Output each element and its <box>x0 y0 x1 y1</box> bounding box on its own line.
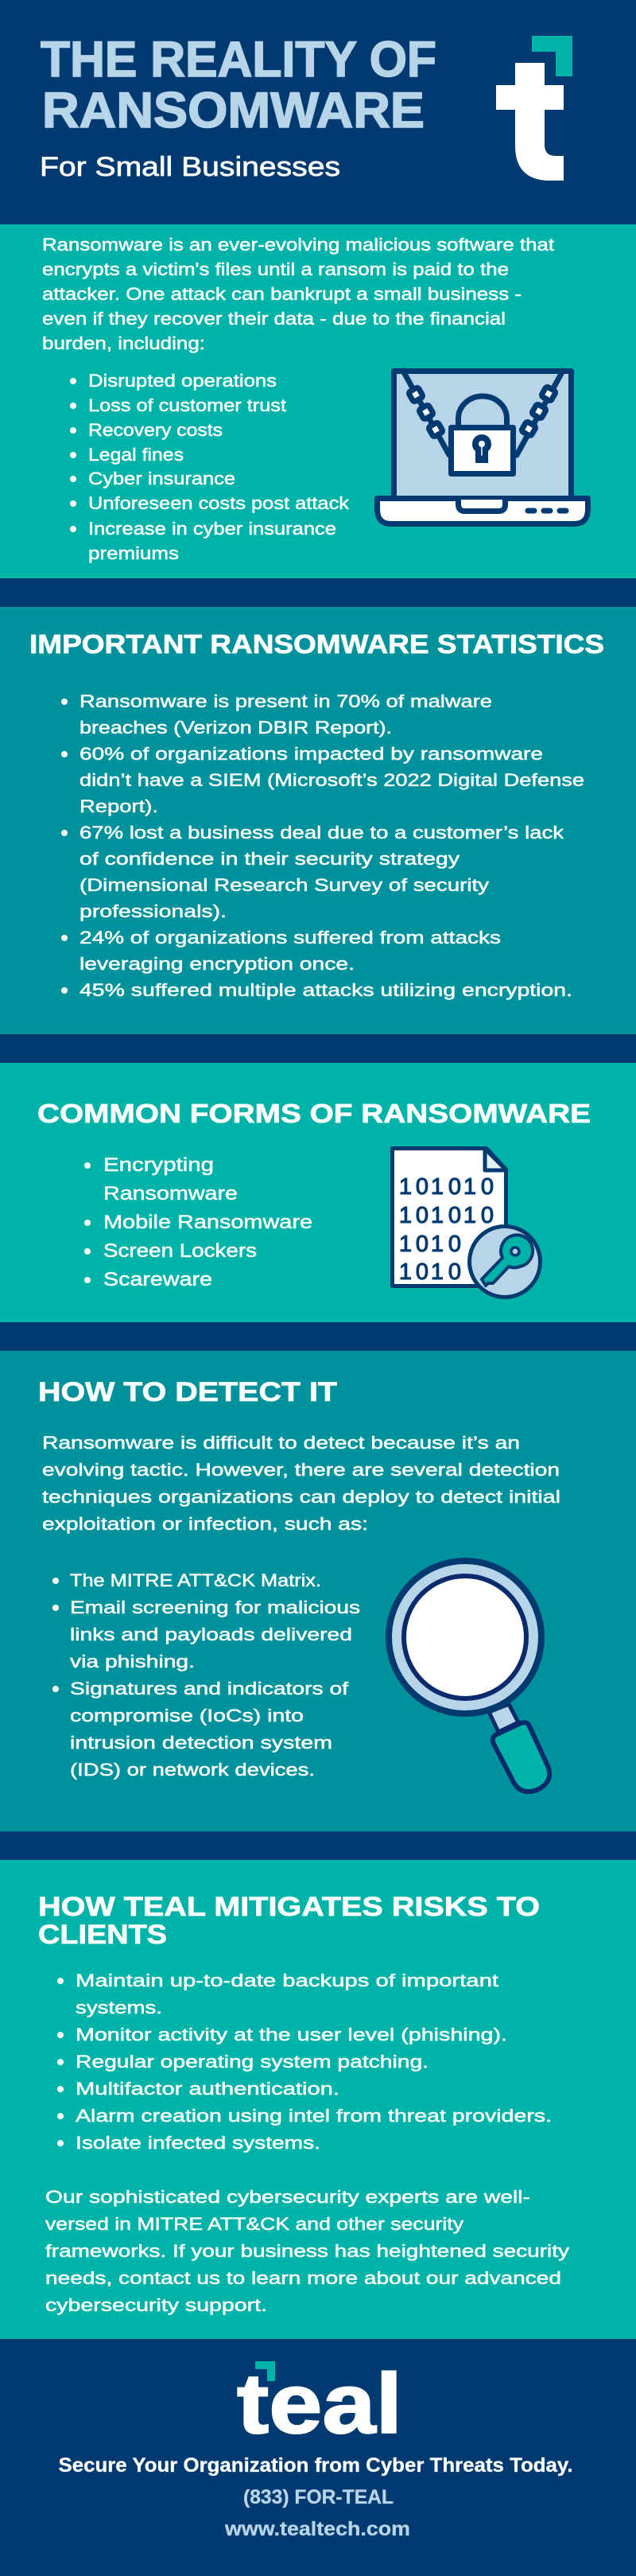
closing paragraph <box>45 2187 569 2315</box>
list: financial burdens: Recovery costs <box>88 420 223 440</box>
title: THE REALITY OF <box>41 32 436 88</box>
phone number: (833) FOR-TEAL <box>243 2486 394 2508</box>
list: financial burdens: Loss of customer trust <box>88 395 286 415</box>
list: financial burdens: premiums <box>88 543 179 563</box>
panel: how to detect <box>0 1351 636 1831</box>
heading: detect: HOW TO DETECT IT <box>38 1377 337 1407</box>
list: financial burdens: Unforeseen costs post attack <box>88 493 350 513</box>
panel: introduction <box>0 224 636 578</box>
closing paragraph: needs, contact us to learn more about our advanced <box>45 2268 561 2288</box>
website: www.tealtech.com <box>224 2518 410 2540</box>
panel: common forms <box>0 1063 636 1322</box>
detect paragraph: exploitation or infection, such as: <box>42 1514 368 1534</box>
list: statistics: professionals). <box>80 901 227 921</box>
icon: binary file with key <box>393 1149 541 1297</box>
panel: how teal mitigates <box>0 1860 636 2339</box>
icon: binary file with key: 101010 <box>399 1203 494 1228</box>
closing paragraph: frameworks. If your business has heightened security <box>45 2241 569 2261</box>
list: financial burdens <box>70 371 350 563</box>
title: RANSOMWARE <box>42 83 425 138</box>
list: mitigations: Maintain up-to-date backups of important <box>76 1971 498 1990</box>
list: statistics: didn’t have a SIEM (Microsoft’s 2022 Digital Defense <box>80 770 584 790</box>
list: statistics: leveraging encryption once. <box>80 954 355 974</box>
closing paragraph: versed in MITRE ATT&CK and other security <box>45 2214 463 2234</box>
closing paragraph: Our sophisticated cybersecurity experts are well- <box>45 2187 530 2207</box>
list: financial burdens: Legal fines <box>88 445 184 465</box>
list: mitigations: Monitor activity at the user level (phishing). <box>76 2025 507 2045</box>
list: statistics: Report). <box>80 796 158 816</box>
list: statistics: 45% suffered multiple attacks utilizing encryption. <box>80 980 572 1000</box>
list: detection techniques: via phishing. <box>70 1652 195 1671</box>
list: detection techniques: links and payloads delivered <box>70 1625 352 1644</box>
intro paragraph <box>42 235 554 353</box>
list: detection techniques: The MITRE ATT&CK Matrix. <box>70 1570 321 1590</box>
heading: common forms: COMMON FORMS OF RANSOMWARE <box>37 1099 591 1128</box>
call to action: Secure Your Organization from Cyber Threats Today. <box>59 2454 572 2477</box>
list: statistics: 24% of organizations suffered from attacks <box>80 928 501 948</box>
list: ransomware types: Scareware <box>103 1269 212 1290</box>
list: mitigations: Regular operating system patching. <box>76 2052 429 2072</box>
logo: teal wordmark: teal <box>237 2356 402 2451</box>
list: statistics: Ransomware is present in 70% of malware <box>80 691 492 711</box>
title <box>41 32 436 138</box>
heading: statistics: IMPORTANT RANSOMWARE STATISTICS <box>29 629 604 659</box>
list: statistics: breaches (Verizon DBIR Report). <box>80 718 392 737</box>
panel: statistics <box>0 607 636 1034</box>
list: ransomware types: Mobile Ransomware <box>103 1212 312 1233</box>
list: statistics <box>61 691 584 1000</box>
icon: binary file with key: 101010 <box>399 1174 494 1200</box>
list: statistics: 67% lost a business deal due to a customer’s lack <box>80 823 564 842</box>
detect paragraph: evolving tactic. However, there are several detection <box>42 1460 560 1480</box>
heading: mitigates: HOW TEAL MITIGATES RISKS TO <box>38 1892 540 1922</box>
list: ransomware types <box>84 1154 312 1290</box>
heading: mitigates <box>38 1892 540 1950</box>
intro paragraph: burden, including: <box>42 333 205 353</box>
list: mitigations: Isolate infected systems. <box>76 2133 320 2153</box>
list: detection techniques <box>52 1570 360 1780</box>
list: mitigations: Multifactor authentication. <box>76 2079 339 2099</box>
list: mitigations <box>57 1971 552 2153</box>
list: detection techniques: (IDS) or network devices. <box>70 1760 315 1780</box>
heading: mitigates: CLIENTS <box>38 1920 167 1950</box>
icon: locked laptop <box>377 371 588 523</box>
detect paragraph: Ransomware is difficult to detect because it’s an <box>42 1433 520 1453</box>
list: ransomware types: Ransomware <box>103 1183 238 1204</box>
icon: teal logo mark <box>496 36 572 181</box>
detect paragraph <box>42 1433 560 1534</box>
icon: binary file with key: 1010 <box>399 1259 461 1285</box>
list: statistics: 60% of organizations impacted by ransomware <box>80 744 543 764</box>
list: financial burdens: Cyber insurance <box>88 469 235 488</box>
intro paragraph: attacker. One attack can bankrupt a small business - <box>42 284 522 304</box>
intro paragraph: Ransomware is an ever-evolving malicious software that <box>42 235 554 255</box>
list: ransomware types: Encrypting <box>103 1154 214 1176</box>
intro paragraph: even if they recover their data - due to the financial <box>42 309 506 329</box>
detect paragraph: techniques organizations can deploy to detect initial <box>42 1487 560 1507</box>
list: financial burdens: Disrupted operations <box>88 371 277 391</box>
list: detection techniques: compromise (IoCs) into <box>70 1706 304 1726</box>
icon: binary file with key: 1010 <box>399 1232 461 1257</box>
closing paragraph: cybersecurity support. <box>45 2295 267 2315</box>
list: mitigations: systems. <box>76 1998 162 2018</box>
subtitle: For Small Businesses <box>40 152 340 182</box>
panel: footer <box>0 2339 636 2576</box>
list: detection techniques: Signatures and indicators of <box>70 1679 349 1699</box>
list: statistics: (Dimensional Research Survey of security <box>80 875 489 895</box>
list: ransomware types: Screen Lockers <box>103 1240 257 1262</box>
list: mitigations: Alarm creation using intel from threat providers. <box>76 2106 552 2126</box>
list: detection techniques: Email screening for malicious <box>70 1597 360 1617</box>
list: detection techniques: intrusion detection system <box>70 1733 332 1753</box>
divider band <box>0 578 636 607</box>
divider band <box>0 1322 636 1351</box>
list: statistics: of confidence in their security strategy <box>80 849 460 869</box>
divider band <box>0 1034 636 1063</box>
panel: header <box>0 0 636 224</box>
icon: magnifying glass <box>389 1561 549 1792</box>
intro paragraph: encrypts a victim's files until a ransom is paid to the <box>42 259 509 279</box>
list: financial burdens: Increase in cyber insurance <box>88 519 336 539</box>
divider band <box>0 1831 636 1860</box>
